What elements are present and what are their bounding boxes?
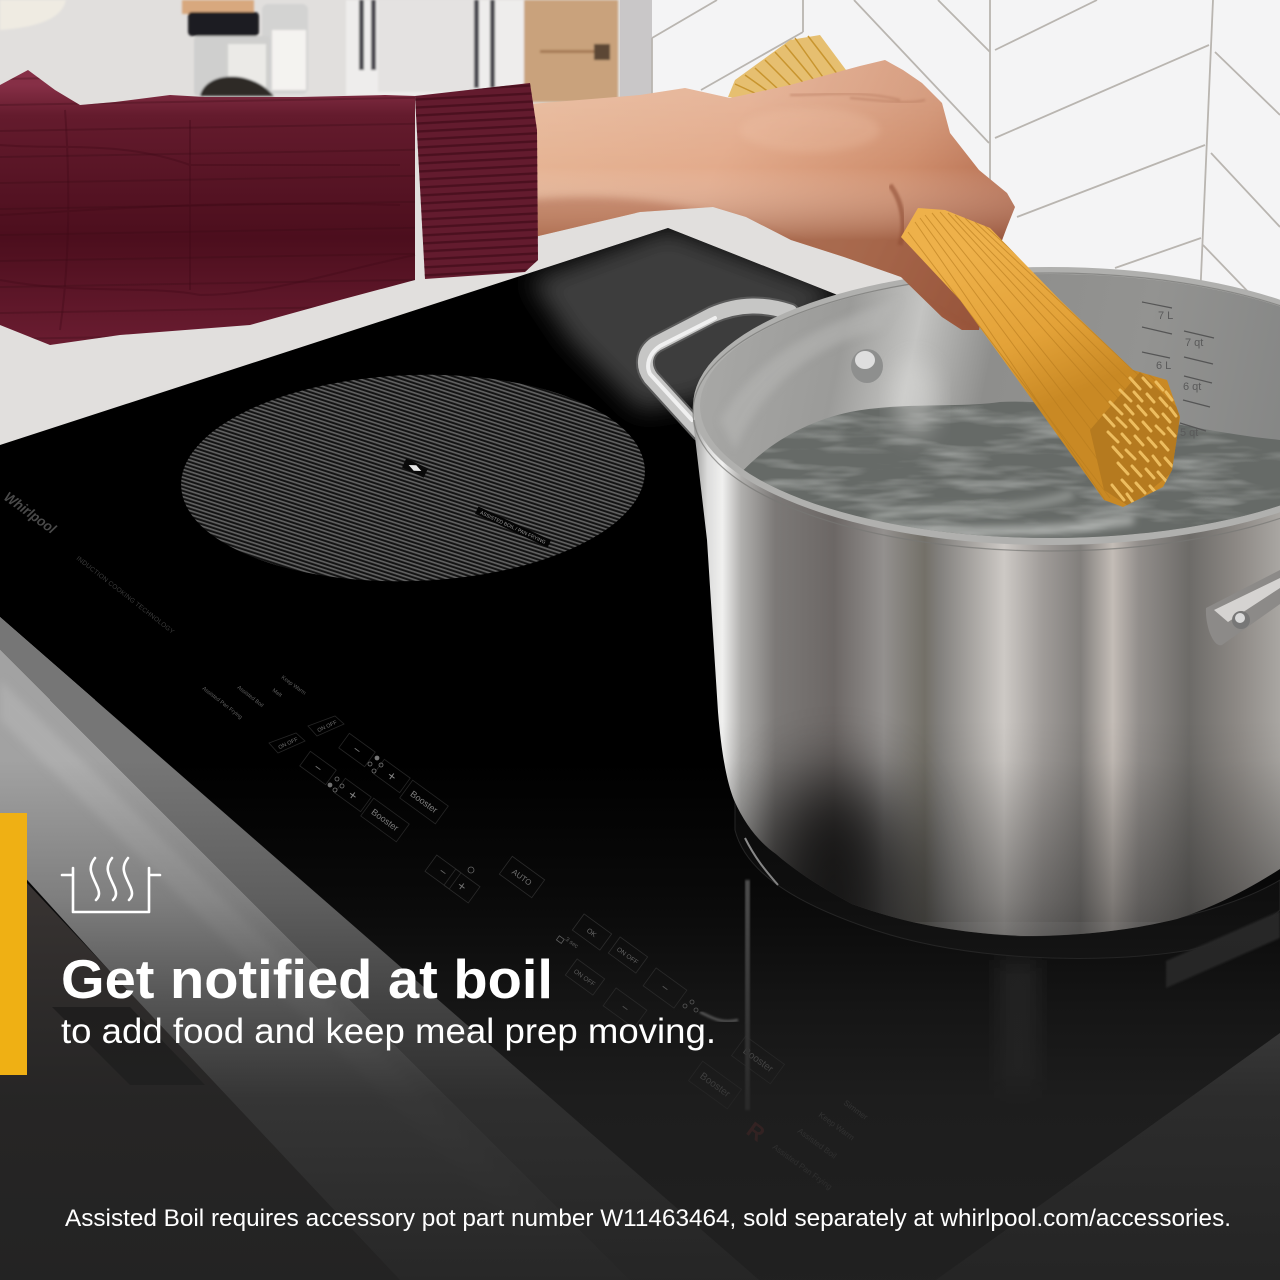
- spaghetti cut ends: [1090, 372, 1180, 507]
- upper touch controls: +: [384, 767, 400, 785]
- upper touch controls: −: [311, 760, 325, 776]
- measuring marks: 7 qt: [1185, 337, 1203, 349]
- lower touch controls: ON OFF: [615, 946, 639, 966]
- upper control labels: [201, 675, 307, 721]
- center touch controls: AUTO: [510, 867, 533, 888]
- boiling water: [725, 314, 1280, 538]
- water droplet on wall: [851, 349, 883, 383]
- lower control labels: Assisted Pan Frying: [771, 1142, 834, 1191]
- spaghetti bundle: [901, 208, 1180, 507]
- heading: Get notified at boil: [61, 949, 553, 1010]
- upper touch controls: Booster: [409, 789, 439, 815]
- center marker: [402, 458, 428, 478]
- upper control labels: Keep Warm: [280, 675, 307, 697]
- whirlpool logo: Whirlpool: [1, 488, 60, 537]
- lower control labels: Assisted Boil: [796, 1126, 838, 1161]
- yellow accent bar: [0, 813, 27, 1075]
- lower counter and oven: [0, 650, 630, 1280]
- upper control labels: Melt: [271, 688, 283, 699]
- upper touch controls: +: [345, 786, 361, 804]
- upper touch controls: ON OFF: [317, 720, 339, 734]
- lower touch controls: 3 sec: [564, 937, 579, 950]
- pasta ends behind hand: [728, 35, 846, 102]
- center touch controls: −: [436, 864, 450, 880]
- pot reflection on glass: [735, 800, 1280, 1110]
- center touch controls: [425, 855, 545, 903]
- subheading: to add food and keep meal prep moving.: [61, 1011, 716, 1051]
- center touch controls: +: [454, 877, 470, 895]
- kitchen counter background: [0, 0, 1280, 700]
- lower touch controls: [556, 914, 784, 1109]
- measuring marks: 7 L: [1158, 310, 1173, 322]
- dark gradient overlay: [0, 760, 1280, 1280]
- red power level display: R: [742, 1117, 770, 1146]
- lower touch controls: ON OFF: [572, 968, 596, 988]
- upper touch controls: ON OFF: [278, 737, 300, 751]
- cooktop tagline: INDUCTION COOKING TECHNOLOGY: [75, 555, 176, 636]
- lower control labels: Simmer: [842, 1098, 870, 1122]
- sweater sleeve: [0, 70, 538, 345]
- lower control labels: [771, 1098, 870, 1191]
- upper touch controls: −: [350, 742, 364, 758]
- left pot handle: [645, 306, 790, 432]
- countertop items: bowl, pepper grinder, salt jar, marble board, wood board: [0, 0, 618, 102]
- measuring marks: [1142, 302, 1214, 439]
- lower touch controls: Booster: [741, 1046, 775, 1075]
- right counter segment: [936, 1033, 1280, 1280]
- pot interior wall: [700, 274, 1280, 538]
- lower touch controls: −: [618, 1000, 632, 1016]
- pot base shadow: [700, 775, 1280, 1035]
- icon: boiling pot: [62, 858, 160, 912]
- lower touch controls: −: [658, 980, 672, 996]
- upper control labels: Assisted Boil: [236, 685, 264, 709]
- white chevron tile backsplash: [620, 0, 1280, 340]
- measuring marks: 5 qt: [1180, 427, 1198, 439]
- lower control labels: Keep Warm: [817, 1110, 856, 1142]
- measuring marks: 6 qt: [1183, 381, 1201, 393]
- zone label: ASSISTED BOIL / PAN FRYING: [479, 510, 546, 546]
- sweater cuff: [415, 83, 538, 279]
- induction element zone: [178, 367, 648, 589]
- lower touch controls: OK: [585, 927, 598, 939]
- forearm and hand: [530, 60, 1030, 340]
- stock pot body: [692, 267, 1280, 936]
- upper touch controls: [269, 716, 448, 842]
- right pot handle: [1206, 570, 1280, 645]
- footnote: Assisted Boil requires accessory pot part number W11463464, sold separately at whirlpool.com/accessories.: [65, 1205, 1231, 1232]
- lower touch controls: Booster: [698, 1071, 732, 1100]
- upper touch controls: Booster: [370, 807, 400, 833]
- upper control labels: Assisted Pan Frying: [201, 686, 243, 721]
- measuring marks: 6 L: [1156, 360, 1171, 372]
- cooktop metal trim: [0, 617, 759, 1280]
- pot rim: [693, 267, 1280, 545]
- cooktop reflection of wall: [530, 228, 840, 410]
- induction cooktop glass: [0, 228, 836, 700]
